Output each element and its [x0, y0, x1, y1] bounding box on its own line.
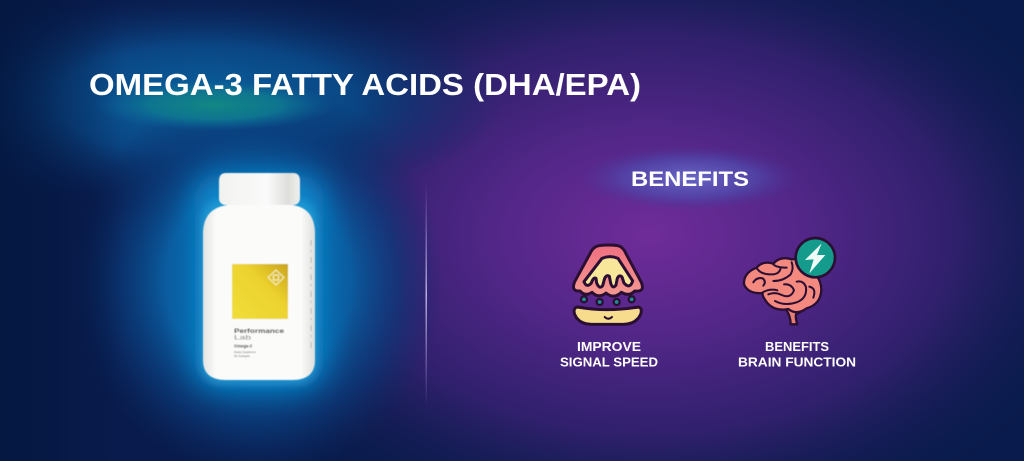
bottle cap	[219, 173, 300, 205]
yellow label	[232, 264, 288, 319]
side label print	[310, 240, 312, 352]
brain stem	[785, 308, 803, 324]
brain	[744, 258, 821, 312]
brand text: Performance	[234, 328, 285, 335]
lightning bolt	[805, 243, 825, 273]
receptor	[574, 307, 641, 324]
product: Performance Lab Omega-3 bottle	[203, 173, 315, 380]
label: benefits brain function	[738, 339, 856, 370]
synapse inner	[584, 257, 633, 287]
label: improve signal speed: IMPROVE	[577, 339, 641, 354]
product: Performance Lab Omega-3 bottle: Lab	[234, 334, 252, 342]
icon: brain with lightning	[744, 238, 835, 324]
divider	[426, 184, 427, 406]
label: benefits brain function: BENEFITS	[765, 339, 829, 354]
bottle glow	[195, 175, 323, 387]
heading: benefits: BENEFITS	[631, 167, 749, 191]
brain folds	[753, 262, 814, 304]
product: Performance Lab Omega-3 bottle: Omega-3	[234, 344, 252, 348]
icon: signal synapse	[573, 245, 642, 324]
smile	[605, 317, 612, 319]
label: improve signal speed	[560, 339, 658, 370]
title: OMEGA-3 FATTY ACIDS (DHA/EPA)	[89, 67, 641, 102]
label: improve signal speed: SIGNAL SPEED	[560, 354, 658, 370]
product: Performance Lab Omega-3 bottle: Dietary Supplement	[234, 350, 256, 354]
neurotransmitter dots	[581, 296, 635, 305]
label logo	[268, 270, 284, 285]
bottle body	[203, 205, 315, 380]
synapse top	[573, 245, 642, 296]
product: Performance Lab Omega-3 bottle: 90 Softgels	[234, 354, 251, 358]
label: benefits brain function: BRAIN FUNCTION	[738, 354, 856, 370]
energy badge	[796, 238, 835, 277]
